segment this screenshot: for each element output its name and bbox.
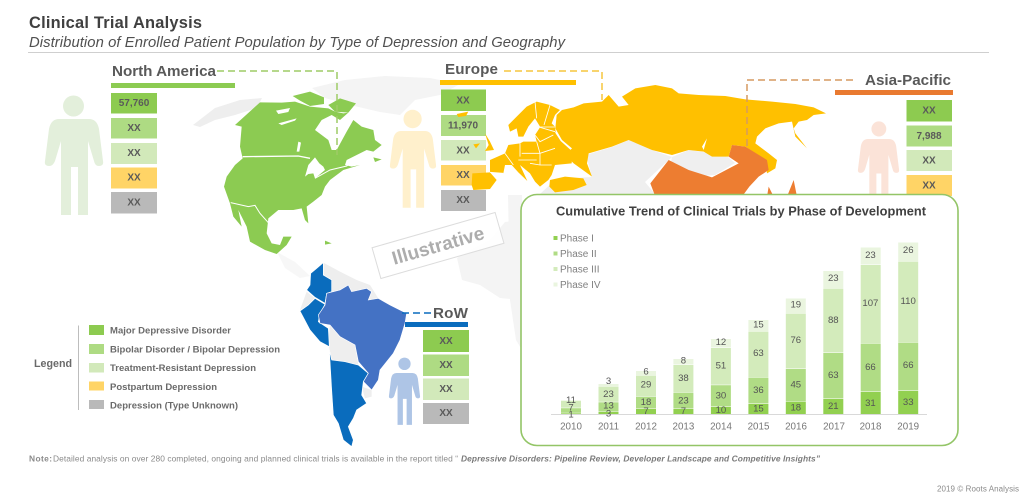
legend: Major Depressive Disorder: [110, 326, 231, 336]
year axis labels: 2017: [823, 422, 845, 432]
RoW values: XX: [439, 360, 453, 371]
data labels: 23: [678, 396, 689, 406]
data labels: 63: [828, 370, 839, 381]
map: Europe and Russia: [457, 85, 826, 197]
RoW values: XX: [439, 336, 453, 347]
data labels: 7: [681, 406, 686, 417]
data labels: 38: [678, 373, 689, 384]
North America values: 57,760: [119, 98, 150, 109]
panel: Asia-Pacific data: [835, 72, 953, 208]
Europe values: XX: [456, 170, 470, 181]
Europe values: 11,970: [448, 120, 478, 132]
RoW values: XX: [439, 384, 453, 395]
data labels: 36: [753, 385, 764, 396]
map: North America: [224, 92, 382, 254]
legend: Bipolar Disorder / Bipolar Depression: [110, 344, 280, 356]
Europe values: [441, 90, 486, 211]
footnote: Detailed analysis on over 280 completed, ongoing and planned clinical trials is available in the report titled “: [53, 454, 458, 464]
data labels: 3: [606, 376, 611, 387]
legend: Treatment-Resistant Depression: [110, 363, 256, 374]
year axis labels: 2018: [860, 422, 882, 432]
data labels: 1: [568, 410, 574, 420]
year axis labels: 2019: [897, 422, 919, 432]
data labels: 19: [790, 300, 801, 310]
North America values: [111, 93, 157, 214]
footnote: Note:: [29, 454, 52, 464]
connector: Europe: [504, 71, 602, 100]
Europe values: XX: [456, 195, 470, 206]
legend: Postpartum Depression: [110, 382, 217, 393]
data labels: 107: [862, 298, 878, 309]
connector: RoW: [402, 312, 431, 314]
data labels: 66: [903, 360, 914, 371]
data labels: 29: [641, 380, 651, 390]
data labels: [566, 245, 916, 420]
illustrative stamp: [372, 212, 504, 279]
data labels: 26: [903, 245, 914, 256]
Asia-Pacific values: [906, 100, 952, 196]
data labels: 15: [753, 320, 764, 330]
RoW values: XX: [439, 408, 453, 419]
data labels: 63: [753, 348, 764, 359]
Asia-Pacific values: XX: [922, 156, 936, 166]
data labels: 13: [603, 400, 614, 412]
chart legend: Phase III: [560, 264, 599, 276]
data labels: 23: [603, 389, 614, 400]
chart legend: Phase I: [560, 234, 594, 244]
North America heading: North America: [112, 63, 217, 80]
data labels: 45: [790, 380, 801, 390]
data labels: 31: [865, 398, 876, 409]
data labels: 10: [716, 405, 726, 416]
legend: Depression (Type Unknown): [110, 400, 238, 412]
icon: Asia-Pacific patient: [858, 121, 899, 208]
data labels: 3: [606, 408, 611, 420]
year axis labels: 2010: [560, 422, 582, 432]
data labels: 51: [716, 360, 726, 372]
data labels: 15: [753, 404, 764, 414]
panel: Rest of World data: [389, 305, 469, 425]
year axis labels: 2015: [748, 422, 770, 432]
Europe values: XX: [456, 146, 470, 156]
subtitle: Distribution of Enrolled Patient Population by Type of Depression and Geography: [29, 35, 567, 51]
RoW values: [423, 330, 469, 424]
data labels: 110: [901, 296, 916, 307]
chart title: Cumulative Trend of Clinical Trials by Phase of Development: [556, 204, 927, 218]
footnote: Depressive Disorders: Pipeline Review, Developer Landscape and Competitive Insights”: [461, 454, 821, 464]
North America values: XX: [127, 172, 141, 184]
chart legend: Phase IV: [560, 280, 601, 291]
RoW heading: RoW: [433, 305, 469, 322]
data labels: 66: [865, 362, 876, 373]
icon: Europe patient: [390, 110, 436, 208]
connector: North America: [217, 71, 337, 155]
data labels: 33: [903, 397, 914, 408]
data labels: 88: [828, 315, 839, 326]
North America values: XX: [127, 198, 141, 208]
Europe heading: Europe: [445, 61, 498, 78]
icon: North America patient: [45, 96, 103, 215]
illustrative stamp: Illustrative: [390, 223, 487, 270]
background world map: [193, 76, 735, 350]
connector: Asia-Pacific: [747, 80, 853, 150]
data labels: 12: [716, 337, 726, 348]
data labels: 21: [828, 401, 839, 412]
data labels: 18: [790, 402, 801, 414]
data labels: 11: [566, 395, 576, 406]
stacked bar chart: [551, 242, 927, 414]
Asia-Pacific values: 7,988: [916, 131, 942, 142]
year axis labels: 2014: [710, 422, 732, 432]
Asia-Pacific values: XX: [922, 106, 936, 116]
panel: cumulative trend chart: [521, 194, 958, 446]
China: [650, 145, 797, 197]
chart legend: Phase II: [560, 249, 597, 260]
footnote: [29, 454, 821, 464]
Asia-Pacific heading: Asia-Pacific: [865, 72, 951, 89]
copyright: 2019 © Roots Analysis: [937, 484, 1019, 494]
data labels: 18: [641, 397, 651, 408]
year axis labels: 2012: [635, 422, 657, 432]
map: South America: [300, 263, 407, 447]
Russia: [555, 85, 826, 177]
data labels: 8: [681, 356, 686, 366]
panel: Europe data: [390, 61, 576, 211]
data labels: 76: [790, 335, 801, 346]
panel: North America data: [45, 63, 235, 215]
data labels: 30: [716, 390, 726, 402]
title: Clinical Trial Analysis: [29, 14, 202, 32]
year axis labels: 2011: [598, 422, 619, 432]
Europe values: XX: [456, 96, 470, 106]
year axis labels: [560, 422, 919, 432]
data labels: 7: [643, 406, 649, 417]
data labels: 23: [828, 273, 839, 284]
North America values: XX: [127, 123, 141, 134]
North America values: XX: [127, 148, 141, 159]
legend: Legend: [34, 358, 72, 370]
year axis labels: 2016: [785, 422, 807, 432]
chart legend: [554, 234, 601, 291]
data labels: 23: [865, 250, 876, 261]
European countries: [457, 102, 587, 192]
legend: [34, 325, 280, 412]
Asia-Pacific values: XX: [922, 180, 936, 192]
data labels: 7: [568, 402, 574, 414]
year axis labels: 2013: [673, 422, 695, 432]
icon: RoW patient: [389, 358, 420, 425]
data labels: 6: [643, 366, 649, 378]
